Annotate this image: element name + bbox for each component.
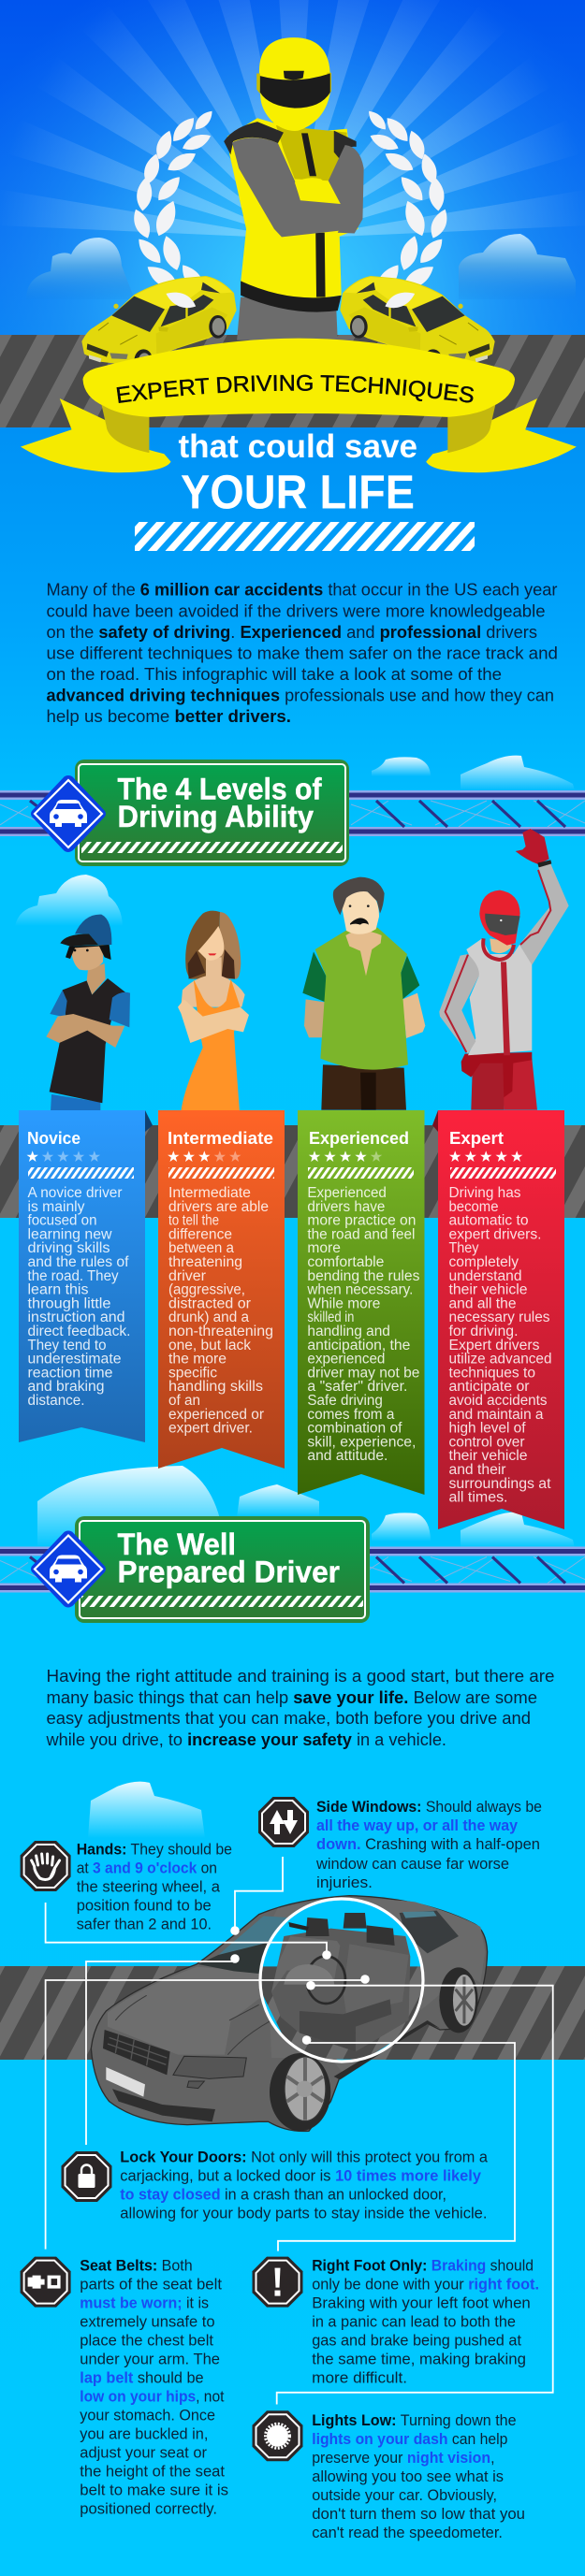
experienced description: driver may not be xyxy=(307,1365,419,1381)
intermediate description: drunk) and a xyxy=(168,1310,249,1325)
novice description: and braking xyxy=(28,1379,105,1395)
experienced description: anticipation, the xyxy=(307,1338,410,1353)
icon: car diamond xyxy=(31,775,106,852)
callout: seat belts: your stomach. Once xyxy=(80,2407,215,2424)
cloud behind hands callout xyxy=(88,1782,205,1838)
road band behind car xyxy=(0,1966,585,2060)
intro paragraph xyxy=(47,580,558,726)
yellow banner xyxy=(21,339,577,472)
experienced description: more practice on xyxy=(307,1213,416,1229)
icon: car diamond xyxy=(31,1530,106,1607)
callout: right foot only: Right Foot Only: Braking should xyxy=(312,2257,534,2275)
expert description: and all the xyxy=(449,1295,517,1311)
wreath bottom leaves over cars xyxy=(164,288,417,312)
panel: intermediate ribbon: Intermediate xyxy=(168,1129,273,1148)
panel: novice ribbon xyxy=(19,1110,153,1442)
rating stars xyxy=(449,1151,522,1162)
green road sign: The Well xyxy=(118,1527,236,1561)
second paragraph: easy adjustments that you can make, both before you drive and xyxy=(47,1708,531,1728)
experienced description: Experienced xyxy=(307,1185,387,1201)
road band with diagonal stripes xyxy=(0,335,585,427)
callout: hands: at 3 and 9 o'clock on xyxy=(77,1859,217,1876)
wreath right xyxy=(365,108,451,297)
green road sign: The 4 Levels of xyxy=(118,773,322,806)
callout: seat belts xyxy=(21,2257,228,2518)
callout: lights low: lights on your dash can help xyxy=(312,2430,507,2448)
figure: intermediate driver xyxy=(178,911,249,1111)
callout: lock your doors xyxy=(62,2148,489,2222)
experienced description: combination of xyxy=(307,1421,402,1437)
banner title xyxy=(117,391,473,403)
band behind ribbons xyxy=(0,1125,585,1218)
hero section xyxy=(0,0,585,551)
expert description: high level of xyxy=(449,1421,526,1437)
second paragraph: while you drive, to increase your safety in a vehicle. xyxy=(46,1729,446,1749)
experienced description xyxy=(306,1185,420,1464)
callout: hands: the steering wheel, a xyxy=(77,1877,221,1895)
expert description: Driving has xyxy=(449,1185,521,1201)
expert description: surroundings at xyxy=(449,1476,551,1492)
expert description: completely xyxy=(449,1254,519,1270)
callout: right foot only: the same time, making braking xyxy=(312,2351,526,2368)
intermediate description: distracted or xyxy=(168,1295,251,1311)
line: side windows xyxy=(235,1857,283,1931)
intermediate description: the more xyxy=(168,1352,227,1368)
rating stars xyxy=(26,1151,100,1162)
line: hands xyxy=(46,1903,327,1955)
intermediate description: Intermediate xyxy=(168,1185,251,1201)
intro paragraph: advanced driving techniques professionals use and how they can xyxy=(47,686,554,705)
callout: seat belts: you are buckled in, xyxy=(80,2425,208,2443)
figure: novice driver xyxy=(46,915,130,1111)
callout: lights low: outside your car. Obviously, xyxy=(312,2486,497,2504)
second paragraph xyxy=(46,1666,555,1749)
expert description: and maintain a xyxy=(449,1407,544,1423)
panel: experienced ribbon: Experienced xyxy=(309,1129,409,1148)
callout: right foot only: in a panic can lead to both the xyxy=(312,2313,516,2331)
callout: seat belts: positioned correctly. xyxy=(80,2500,217,2518)
connector lines and dots xyxy=(46,1857,553,2404)
intermediate description: to tell the xyxy=(168,1213,219,1229)
figure: experienced driver xyxy=(302,877,425,1110)
novice description: reaction time xyxy=(28,1365,113,1381)
callout: lock your doors: allowing for your body parts to stay inside the vehicle. xyxy=(120,2204,488,2222)
callout: hands: Hands: They should be xyxy=(77,1840,232,1858)
intermediate description: threatening xyxy=(168,1254,242,1270)
callout: seat belts: low on your hips, not xyxy=(80,2388,225,2406)
intermediate description: specific xyxy=(168,1365,217,1381)
intro paragraph: use different techniques to make them safer on the race track and xyxy=(47,644,558,662)
green road sign xyxy=(75,1516,370,1623)
yellow car left xyxy=(81,276,237,373)
experienced description: experienced xyxy=(307,1352,385,1368)
section header: the 4 levels xyxy=(0,756,585,866)
experienced description: and attitude. xyxy=(307,1448,388,1464)
experienced description: the road and feel xyxy=(307,1226,415,1242)
callout: lock your doors: Lock Your Doors: Not only will this protect you from a xyxy=(120,2148,489,2166)
intermediate description: expert driver. xyxy=(168,1421,253,1437)
clouds below ribbons xyxy=(37,1466,575,1548)
callout: seat belts: extremely unsafe to xyxy=(80,2313,215,2331)
intro paragraph: help us become better drivers. xyxy=(47,706,291,726)
headline: YOUR LIFE xyxy=(181,466,415,518)
novice description: distance. xyxy=(28,1393,84,1409)
hazard stripes under headline xyxy=(135,522,475,551)
callout: lights low: preserve your night vision, xyxy=(312,2449,494,2467)
novice description: driving skills xyxy=(28,1240,110,1256)
expert description: for driving. xyxy=(449,1324,519,1339)
section header: the well prepared driver xyxy=(0,1516,585,1623)
rating stars xyxy=(168,1151,241,1162)
expert description: necessary rules xyxy=(449,1310,550,1325)
novice description: focused on xyxy=(28,1213,97,1229)
callout: seat belts: parts of the seat belt xyxy=(80,2276,222,2294)
panel: expert ribbon xyxy=(432,1110,564,1529)
headline xyxy=(178,428,417,518)
novice description: the road. They xyxy=(28,1268,119,1284)
intro paragraph: on the road. This infographic will take a look at some of the xyxy=(47,664,502,684)
line: right foot xyxy=(278,2043,515,2251)
experienced description: when necessary. xyxy=(306,1282,413,1298)
intermediate description: driver xyxy=(168,1268,206,1284)
callout: seat belts: must be worn; it is xyxy=(80,2294,209,2312)
callout: side windows: Side Windows: Should always be xyxy=(316,1798,542,1816)
experienced description: skill, experience, xyxy=(307,1434,416,1450)
intermediate description: experienced or xyxy=(168,1407,264,1423)
callout: seat belts: place the chest belt xyxy=(80,2332,213,2350)
novice description: learning new xyxy=(28,1226,112,1242)
expert description: anticipate or xyxy=(449,1379,530,1395)
clouds left and right xyxy=(26,234,576,299)
callout: right foot only: Braking with your left foot when xyxy=(312,2294,531,2312)
novice description xyxy=(28,1185,131,1409)
hero section: EXPERT DRIVING TECHNIQUES xyxy=(116,374,474,403)
intermediate description: (aggressive, xyxy=(168,1282,245,1298)
grey car illustration xyxy=(91,1896,488,2132)
headline: that could save xyxy=(178,428,417,465)
connector dots xyxy=(230,1926,370,2045)
yellow car right xyxy=(340,276,495,373)
expert description: become xyxy=(449,1199,498,1215)
truss gantry xyxy=(0,1547,585,1592)
callout: hands: safer than 2 and 10. xyxy=(77,1915,212,1932)
intermediate description: between a xyxy=(168,1240,234,1256)
magnifier circle xyxy=(260,1899,423,2062)
sky glow and sun rays xyxy=(0,0,585,335)
callout: right foot only: more difficult. xyxy=(312,2369,407,2387)
novice description: instruction and xyxy=(28,1310,125,1325)
icon: exclamation mark xyxy=(253,2257,303,2308)
intermediate description: drivers are able xyxy=(168,1199,269,1215)
callout: side windows: injuries. xyxy=(316,1874,373,1891)
experienced description: drivers have xyxy=(307,1199,385,1215)
line: lights low xyxy=(277,1986,553,2404)
expert description: avoid accidents xyxy=(449,1393,548,1409)
novice description: underestimate xyxy=(28,1352,122,1368)
expert description: techniques to xyxy=(449,1365,535,1381)
experienced description: skilled in xyxy=(307,1310,354,1325)
intermediate description: one, but lack xyxy=(168,1338,251,1353)
panel: expert ribbon: Expert xyxy=(449,1129,504,1148)
second paragraph: Having the right attitude and training is a good start, but there are xyxy=(47,1666,554,1686)
callout: lock your doors: carjacking, but a locked door is 10 times more likely xyxy=(120,2167,482,2185)
novice description: They tend to xyxy=(28,1338,107,1353)
callout: seat belts: adjust your seat or xyxy=(80,2444,207,2462)
intermediate description: non-threatening xyxy=(168,1324,273,1339)
novice description: is mainly xyxy=(28,1199,85,1215)
icon: seat belt buckle xyxy=(21,2257,71,2308)
callout: lights low xyxy=(253,2410,525,2541)
line: seat belts xyxy=(46,1980,365,2250)
green road sign xyxy=(75,760,349,866)
racing driver figure xyxy=(224,37,364,340)
expert description: utilize advanced xyxy=(449,1352,552,1368)
callout: side windows: window can cause far worse xyxy=(315,1855,509,1873)
intermediate description: of an xyxy=(168,1393,200,1409)
callout: hands xyxy=(21,1840,232,1932)
intro paragraph: on the safety of driving. Experienced and professional drivers xyxy=(47,622,537,642)
callout: seat belts: Seat Belts: Both xyxy=(80,2257,193,2275)
novice description: through little xyxy=(28,1295,111,1311)
clouds behind truss xyxy=(372,756,575,790)
expert description: their vehicle xyxy=(449,1448,528,1464)
expert description: automatic to xyxy=(449,1213,528,1229)
expert description: their vehicle xyxy=(449,1282,528,1298)
experienced description: While more xyxy=(307,1295,380,1311)
icon: up and down arrows xyxy=(258,1797,309,1847)
icon: light burst xyxy=(253,2410,303,2461)
callout: seat belts: belt to make sure it is xyxy=(80,2482,228,2499)
icon: hand xyxy=(21,1841,71,1891)
experienced description: more xyxy=(307,1240,341,1256)
panel: intermediate ribbon xyxy=(158,1110,285,1469)
callout: side windows: down. Crashing with a half-open xyxy=(316,1835,540,1853)
callout: seat belts: under your arm. The xyxy=(80,2351,220,2368)
intro paragraph: Many of the 6 million car accidents that occur in the US each year xyxy=(47,580,558,600)
novice description: and the rules of xyxy=(28,1254,129,1270)
icon: padlock xyxy=(62,2151,112,2202)
experienced description: a "safer" driver. xyxy=(307,1379,407,1395)
callout: lights low: don't turn them so low that you xyxy=(312,2505,525,2523)
expert description: They xyxy=(449,1240,479,1256)
panel: novice ribbon: Novice xyxy=(27,1129,80,1148)
intro paragraph: could have been avoided if the drivers were more knowledgeable xyxy=(47,601,545,620)
callout: lights low: Lights Low: Turning down the xyxy=(312,2411,517,2429)
cloud behind novice xyxy=(15,875,123,926)
novice description: A novice driver xyxy=(28,1185,122,1201)
interior cutaway xyxy=(260,1898,423,2062)
callout: right foot only: gas and brake being pushed at xyxy=(312,2332,521,2350)
green road sign: Driving Ability xyxy=(118,800,314,833)
novice description: direct feedback. xyxy=(28,1324,131,1339)
callout: right foot only: only be done with your right foot. xyxy=(312,2276,539,2294)
callout: seat belts: the height of the seat xyxy=(80,2463,225,2481)
wreath left xyxy=(129,108,216,297)
experienced description: comes from a xyxy=(307,1407,395,1423)
truss gantry xyxy=(0,790,585,836)
expert description: and their xyxy=(449,1462,505,1478)
callout: seat belts: lap belt should be xyxy=(80,2369,204,2387)
callout: side windows: all the way up, or all the way xyxy=(316,1816,519,1834)
intermediate description: difference xyxy=(168,1226,232,1242)
callout: side windows xyxy=(258,1797,542,1891)
experienced description: Safe driving xyxy=(307,1393,383,1409)
intermediate description: handling skills xyxy=(168,1379,263,1395)
panel: experienced ribbon xyxy=(298,1110,425,1495)
expert description: all times. xyxy=(449,1490,507,1506)
experienced description: bending the rules xyxy=(307,1268,420,1284)
experienced description: handling and xyxy=(307,1324,390,1339)
experienced description: comfortable xyxy=(307,1254,384,1270)
expert description: expert drivers. xyxy=(449,1226,541,1242)
expert description xyxy=(449,1185,552,1506)
callout: lock your doors: to stay closed in a crash than an unlocked door, xyxy=(120,2186,446,2204)
expert description: control over xyxy=(449,1434,524,1450)
expert description: understand xyxy=(449,1268,522,1284)
second paragraph: many basic things that can help save your life. Below are some xyxy=(47,1687,537,1707)
callout: right foot only xyxy=(253,2257,539,2387)
green road sign: Prepared Driver xyxy=(118,1556,340,1589)
novice description: learn this xyxy=(28,1282,89,1298)
intermediate description xyxy=(168,1185,273,1437)
expert description: Expert drivers xyxy=(449,1338,540,1353)
callout: lights low: allowing you too see what is xyxy=(312,2467,504,2485)
rating stars xyxy=(309,1151,382,1162)
figure: expert driver xyxy=(439,829,569,1110)
callout: lights low: can't read the speedometer. xyxy=(312,2524,503,2541)
line: lock doors xyxy=(86,1961,235,2145)
callout: hands: position found to be xyxy=(77,1896,212,1914)
